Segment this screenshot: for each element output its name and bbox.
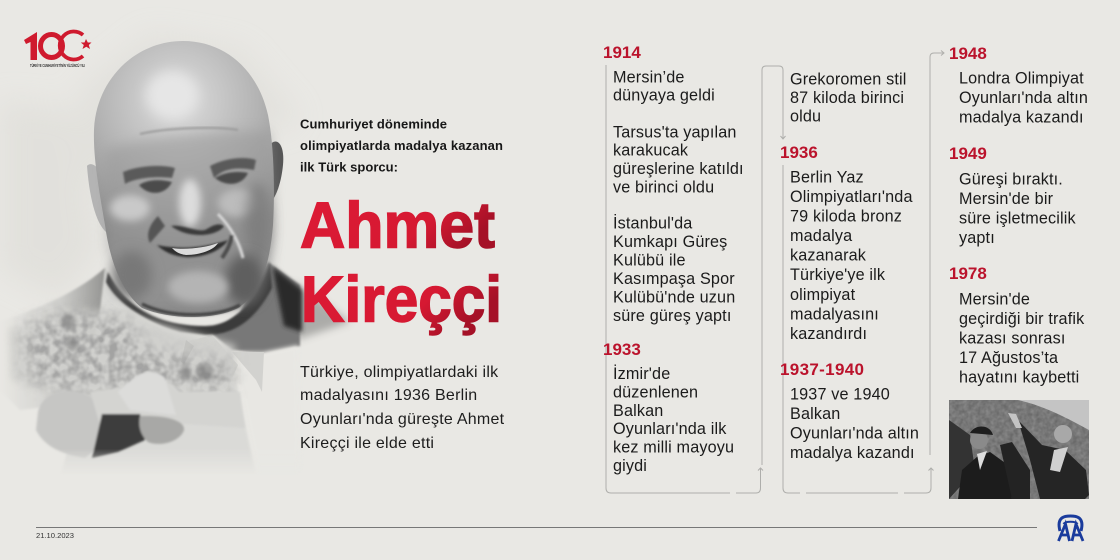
- text 1936: kazanarak: [790, 246, 867, 264]
- text 1936: [790, 168, 913, 343]
- text 1937-1940: madalya kazandı: [790, 444, 915, 462]
- intro paragraph: madalyasını 1936 Berlin: [300, 387, 477, 404]
- title: name: [300, 188, 502, 336]
- text 1949: [959, 170, 1077, 247]
- timeline connector lines: [606, 50, 944, 493]
- text 1937-1940: 1937 ve 1940: [790, 386, 890, 404]
- text 1978: 17 Ağustos’ta: [959, 349, 1058, 367]
- brows, eyes, nose shadow: [123, 158, 256, 258]
- text 1936: Berlin Yaz: [790, 168, 864, 186]
- crowd overlay: [10, 310, 235, 395]
- year 1933: 1933: [603, 340, 641, 359]
- text 1936: Olimpiyatları'nda: [790, 188, 913, 206]
- portrait photo of Ahmet Kireççi: [0, 41, 350, 480]
- text 1949: süre işletmecilik: [959, 210, 1077, 228]
- subheading: ilk Türk sporcu:: [300, 160, 398, 174]
- text 1949: yaptı: [959, 229, 995, 247]
- text 1933: giydi: [613, 457, 647, 475]
- timeline column 1: [603, 43, 744, 475]
- text 1936: kazandırdı: [790, 325, 867, 343]
- text 1933: İzmir'de: [613, 364, 670, 383]
- shirt front right: [236, 342, 300, 355]
- lapel right: [212, 262, 300, 354]
- text 1914: güreşlerine katıldı: [613, 160, 744, 178]
- subheading: Cumhuriyet döneminde: [300, 116, 447, 132]
- text 1914: dünyaya geldi: [613, 86, 715, 104]
- forehead crease: [140, 128, 238, 134]
- text 1914: [613, 68, 744, 325]
- text 1914: süre güreş yaptı: [613, 307, 731, 325]
- text 1933: [613, 364, 734, 475]
- text 1937-1940: Oyunları'nda altın: [790, 424, 919, 442]
- figure middle: [1000, 442, 1030, 499]
- wrestlers overlay: [36, 372, 245, 458]
- text 1933: Oyunları'nda ilk: [613, 420, 727, 438]
- text 1914: İstanbul'da: [613, 214, 692, 232]
- AA logo: [1058, 516, 1083, 541]
- year 1914: 1914: [603, 43, 641, 62]
- text 1914: ve birinci oldu: [613, 178, 714, 196]
- year 1948: 1948: [949, 44, 987, 63]
- text 1933: Balkan: [613, 402, 663, 420]
- smile: [157, 240, 228, 257]
- date: 21.10.2023: [36, 531, 74, 540]
- footer rule: [36, 527, 1037, 528]
- text 1978: kazası sonrası: [959, 330, 1065, 348]
- text 1933 continued: 87 kiloda birinci: [790, 89, 904, 107]
- title: name: Ahmet: [300, 188, 495, 262]
- figure right: [1018, 420, 1089, 499]
- logo caption: TÜRKİYE CUMHURİYETİ'NİN YÜZÜNCÜ YILI: [30, 63, 85, 68]
- star: [81, 39, 92, 49]
- text 1937-1940: [790, 386, 919, 462]
- text 1933: kez milli mayoyu: [613, 438, 734, 456]
- timeline column 2: [780, 70, 919, 462]
- shirt: [66, 270, 251, 460]
- text 1914: Kulübü ile: [613, 252, 686, 270]
- ears: [87, 164, 108, 232]
- text 1937-1940: Balkan: [790, 405, 840, 423]
- logo: Cumhuriyet 100th year: [24, 31, 92, 68]
- title: name: Kireççi: [301, 262, 502, 336]
- text 1936: 79 kiloda bronz: [790, 208, 902, 226]
- text 1933: düzenlenen: [613, 384, 698, 402]
- subheading: olimpiyatlarda madalya kazanan: [300, 138, 503, 153]
- text 1948: madalya kazandı: [959, 108, 1084, 126]
- year 1937-1940: 1937-1940: [780, 360, 864, 379]
- text 1949: Güreşi bıraktı.: [959, 170, 1063, 188]
- text 1978: geçirdiği bir trafik: [959, 310, 1085, 328]
- text 1936: madalya: [790, 227, 852, 245]
- jacket left shoulder: [17, 268, 106, 409]
- text 1936: Türkiye'ye ilk: [790, 266, 886, 284]
- text 1914: Kulübü'nde uzun: [613, 288, 735, 306]
- text 1936: olimpiyat: [790, 286, 856, 304]
- text 1978: Mersin'de: [959, 290, 1030, 308]
- text 1949: Mersin'de bir: [959, 190, 1054, 208]
- text 1933 continued: Grekoromen stil: [790, 70, 906, 88]
- text 1914: Tarsus'ta yapılan: [613, 124, 737, 142]
- text 1948: [959, 70, 1088, 126]
- text 1914: Mersin’de: [613, 68, 685, 86]
- text 1914: Kumkapı Güreş: [613, 233, 727, 251]
- head: [94, 41, 274, 317]
- intro paragraph: Türkiye, olimpiyatlardaki ilk: [300, 364, 499, 381]
- soft jacket shadow behind the name: [292, 282, 350, 340]
- text 1978: hayatını kaybetti: [959, 368, 1079, 386]
- intro paragraph: [300, 364, 505, 452]
- dark collar band: [106, 262, 272, 335]
- intro paragraph: Kireççi ile elde etti: [300, 435, 434, 452]
- figure left: [958, 452, 1012, 499]
- intro paragraph: Oyunları'nda güreşte Ahmet: [300, 411, 505, 428]
- year 1978: 1978: [949, 264, 987, 283]
- timeline column 3: [949, 44, 1088, 386]
- text 1914: karakucak: [613, 142, 689, 160]
- year 1949: 1949: [949, 144, 987, 163]
- text 1933 continued: oldu: [790, 108, 821, 126]
- text 1948: Londra Olimpiyat: [959, 70, 1084, 88]
- text 1948: Oyunları'nda altın: [959, 89, 1088, 107]
- face shading: [105, 71, 274, 315]
- subheading: [300, 116, 503, 174]
- stadium photo: [949, 400, 1089, 499]
- text 1933 continued: [790, 70, 906, 126]
- text 1978: [959, 290, 1085, 386]
- text 1936: madalyasını: [790, 306, 879, 324]
- text 1914: Kasımpaşa Spor: [613, 270, 735, 288]
- year 1936: 1936: [780, 143, 818, 162]
